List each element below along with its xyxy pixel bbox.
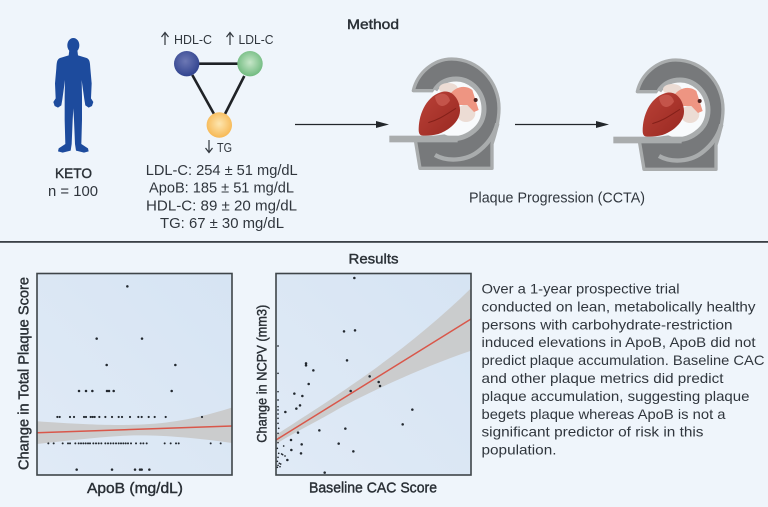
x axis label: Baseline CAC Score xyxy=(309,481,437,497)
caption: Plaque Progression (CCTA): Plaque Progression (CCTA) xyxy=(469,191,645,207)
text: baseline lipid values: HDL-C: 89 ± 20 mg/dL xyxy=(146,198,297,214)
y axis label: Change in NCPV (mm3) xyxy=(254,305,270,443)
text: results summary xyxy=(482,280,764,458)
diagram: lipid triad: TG xyxy=(217,140,232,155)
label: KETO group: n = 100 xyxy=(48,183,98,200)
diagram: lipid triad: HDL-C xyxy=(174,32,212,47)
text: baseline lipid values: ApoB: 185 ± 51 mg/dL xyxy=(149,180,294,197)
arrow: to first scan xyxy=(295,121,389,128)
arrow: to second scan xyxy=(515,121,609,128)
text: results summary: persons with carbohydrate-restriction xyxy=(482,316,732,332)
label: KETO group xyxy=(48,165,98,200)
label: KETO group: KETO xyxy=(55,165,92,181)
diagram: lipid triad xyxy=(162,32,274,155)
text: results summary: predict plaque accumulation. Baseline CAC xyxy=(482,352,764,368)
text: baseline lipid values: TG: 67 ± 30 mg/dL xyxy=(160,215,284,232)
text: results summary: conducted on lean, metabolically healthy xyxy=(482,298,756,314)
data points xyxy=(277,278,412,473)
data points xyxy=(48,286,221,470)
text: results summary: and other plaque metrics did predict xyxy=(482,370,724,386)
diagram: lipid triad: LDL-C xyxy=(238,32,274,47)
text: results summary: induced elevations in ApoB, ApoB did not xyxy=(482,334,756,350)
icon: CT scanner with heart, follow-up xyxy=(613,60,723,169)
y axis label: Change in Total Plaque Score xyxy=(16,277,32,470)
text: results summary: Over a 1-year prospective trial xyxy=(482,280,680,296)
icon: CT scanner with heart, baseline xyxy=(389,59,499,168)
text: results summary: significant predictor of risk in this xyxy=(482,424,704,440)
x axis label: ApoB (mg/dL) xyxy=(87,481,183,497)
chart: change in total plaque score vs ApoB xyxy=(16,274,232,497)
text: results summary: plaque accumulation, suggesting plaque xyxy=(482,388,750,404)
chart: change in NCPV vs baseline CAC xyxy=(254,274,471,497)
text: baseline lipid values xyxy=(146,162,298,232)
icon: human figure xyxy=(53,38,93,153)
text: results summary: begets plaque whereas ApoB is not a xyxy=(482,406,726,422)
text: baseline lipid values: LDL-C: 254 ± 51 mg/dL xyxy=(146,162,298,179)
heading: Results: Results xyxy=(348,250,398,266)
heading: Method: Method xyxy=(347,16,399,32)
text: results summary: population. xyxy=(482,442,556,458)
